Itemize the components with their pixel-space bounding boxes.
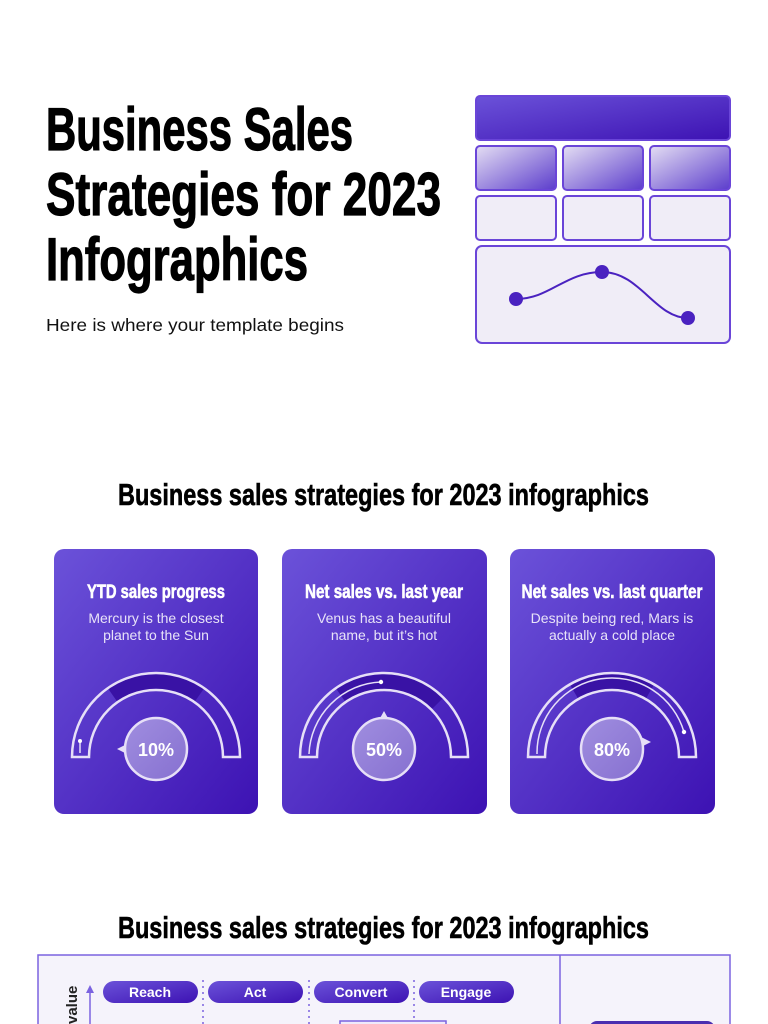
card 2: 50%	[366, 740, 402, 760]
card 1	[54, 549, 258, 814]
panel: funnel chart: Reach	[129, 984, 171, 1000]
card 2: Net sales vs. last year	[305, 582, 463, 603]
card 1: Mercury is the closest	[88, 610, 224, 626]
title: Strategies for 2023	[46, 161, 441, 228]
card 2	[282, 549, 487, 814]
title: Business Sales	[46, 96, 353, 163]
card 1: 10%	[138, 740, 174, 760]
panel: funnel chart: Act	[244, 984, 267, 1000]
card 2: Venus has a beautiful	[317, 610, 451, 626]
card 3: Despite being red, Mars is	[531, 610, 693, 626]
panel: funnel chart: Convert	[335, 984, 388, 1000]
title: Infographics	[46, 226, 308, 293]
card 1: planet to the Sun	[103, 627, 209, 643]
card 3: Net sales vs. last quarter	[522, 582, 703, 603]
card 1: YTD sales progress	[87, 582, 225, 603]
subtitle: Here is where your template begins	[46, 315, 344, 335]
panel: funnel chart	[38, 955, 730, 1024]
card 3: 80%	[594, 740, 630, 760]
card 3: actually a cold place	[549, 627, 675, 643]
panel: funnel chart: value	[64, 986, 81, 1024]
illustration: dashboard	[476, 96, 730, 343]
title	[46, 96, 441, 293]
panel: funnel chart: Engage	[441, 984, 491, 1000]
card 2: name, but it’s hot	[331, 627, 437, 643]
card 3	[510, 549, 715, 814]
